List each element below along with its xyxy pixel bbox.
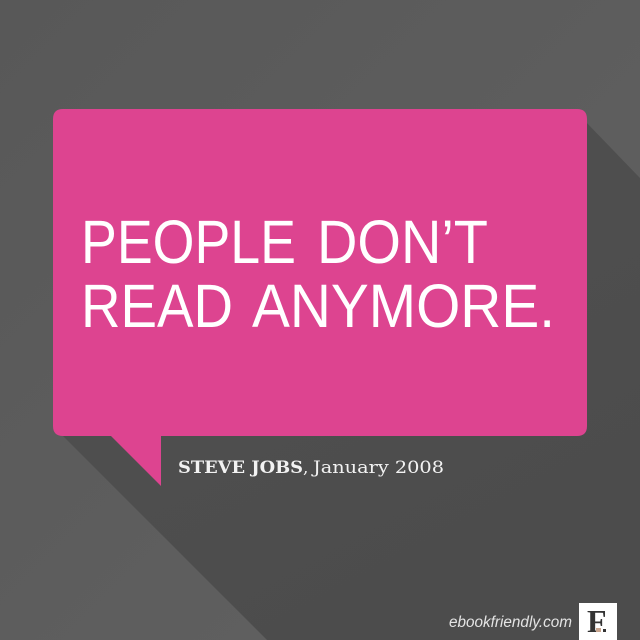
attribution: January 2008 <box>311 458 444 478</box>
logo: ebookfriendly F: F <box>587 603 607 639</box>
line 1: DON’T <box>317 208 488 276</box>
line 2: READ <box>81 272 233 340</box>
attribution: STEVE JOBS <box>178 458 303 478</box>
line 1: PEOPLE <box>81 208 296 276</box>
attribution: , <box>303 458 308 478</box>
logo: ebookfriendly F <box>579 603 617 640</box>
speech bubble <box>53 109 587 486</box>
line 2: ANYMORE. <box>252 272 555 340</box>
long diagonal shadow <box>61 120 640 640</box>
website label: ebookfriendly.com <box>449 614 572 631</box>
quote headline <box>81 208 555 340</box>
